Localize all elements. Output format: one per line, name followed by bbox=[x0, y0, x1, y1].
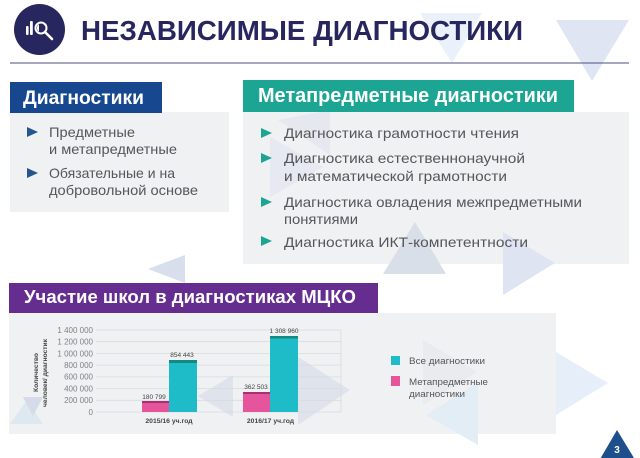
legend: Метапредметные bbox=[409, 377, 488, 387]
list: diagnostics: Обязательные и на bbox=[49, 165, 175, 181]
value labels: 1 308 960 bbox=[270, 328, 299, 335]
bars 2015/16 bbox=[142, 360, 197, 412]
y axis title: человек/ диагностик bbox=[43, 339, 49, 407]
list: diagnostics: добровольной основе bbox=[49, 182, 198, 198]
value labels: 854 443 bbox=[170, 352, 194, 359]
y axis title bbox=[34, 339, 49, 407]
title: НЕЗАВИСИМЫЕ ДИАГНОСТИКИ bbox=[81, 15, 523, 46]
list: metasubject diagnostics: Диагностика естественнонаучной bbox=[284, 150, 525, 166]
list: diagnostics: и метапредметные bbox=[49, 141, 177, 157]
list: metasubject diagnostics: понятиями bbox=[284, 211, 358, 227]
y axis labels bbox=[57, 326, 94, 417]
page number bbox=[601, 430, 634, 458]
list: metasubject diagnostics: Диагностика грамотности чтения bbox=[284, 125, 519, 141]
heading: school participation bbox=[9, 283, 378, 313]
value labels: 180 799 bbox=[142, 394, 166, 401]
category labels: 2015/16 уч.год bbox=[145, 418, 193, 425]
y axis labels: 200 000 bbox=[64, 396, 94, 405]
icon: magnifier with bars bbox=[14, 4, 65, 55]
list: diagnostics: Предметные bbox=[49, 124, 135, 140]
category labels: 2016/17 уч.год bbox=[247, 418, 295, 425]
list: metasubject diagnostics bbox=[261, 125, 582, 250]
list: metasubject diagnostics: Диагностика ИКТ-компетентности bbox=[284, 234, 528, 250]
legend: Все диагностики bbox=[409, 356, 485, 366]
bar chart bbox=[34, 326, 341, 425]
bars 2016/17 bbox=[243, 336, 298, 412]
y axis labels: 600 000 bbox=[64, 372, 94, 382]
category labels bbox=[145, 418, 295, 425]
list: metasubject diagnostics: и математической грамотности bbox=[284, 168, 507, 184]
list: diagnostics bbox=[27, 124, 198, 198]
list: metasubject diagnostics: Диагностика овладения межпредметными bbox=[284, 194, 582, 210]
page number: 3 bbox=[614, 445, 620, 456]
heading: school participation: Участие школ в диагностиках МЦКО bbox=[24, 287, 356, 307]
legend bbox=[391, 356, 488, 399]
y axis labels: 1 400 000 bbox=[57, 326, 94, 335]
y axis labels: 800 000 bbox=[64, 361, 94, 370]
heading: diagnostics bbox=[10, 82, 162, 113]
value labels: 362 503 bbox=[244, 384, 268, 391]
panel: metasubject body bbox=[243, 112, 629, 264]
y axis labels: 1 000 000 bbox=[57, 350, 94, 358]
panel: diagnostics body bbox=[10, 112, 229, 212]
y axis title: Количество bbox=[34, 353, 40, 392]
panel: chart body bbox=[9, 313, 556, 434]
y axis labels: 0 bbox=[89, 408, 94, 417]
y axis labels: 400 000 bbox=[64, 384, 94, 394]
heading: metasubject diagnostics bbox=[243, 80, 574, 112]
legend: диагностики bbox=[409, 389, 465, 399]
heading: metasubject diagnostics: Метапредметные диагностики bbox=[258, 85, 558, 107]
value labels bbox=[142, 328, 299, 401]
y axis labels: 1 200 000 bbox=[57, 338, 94, 346]
heading: diagnostics: Диагностики bbox=[23, 88, 144, 109]
